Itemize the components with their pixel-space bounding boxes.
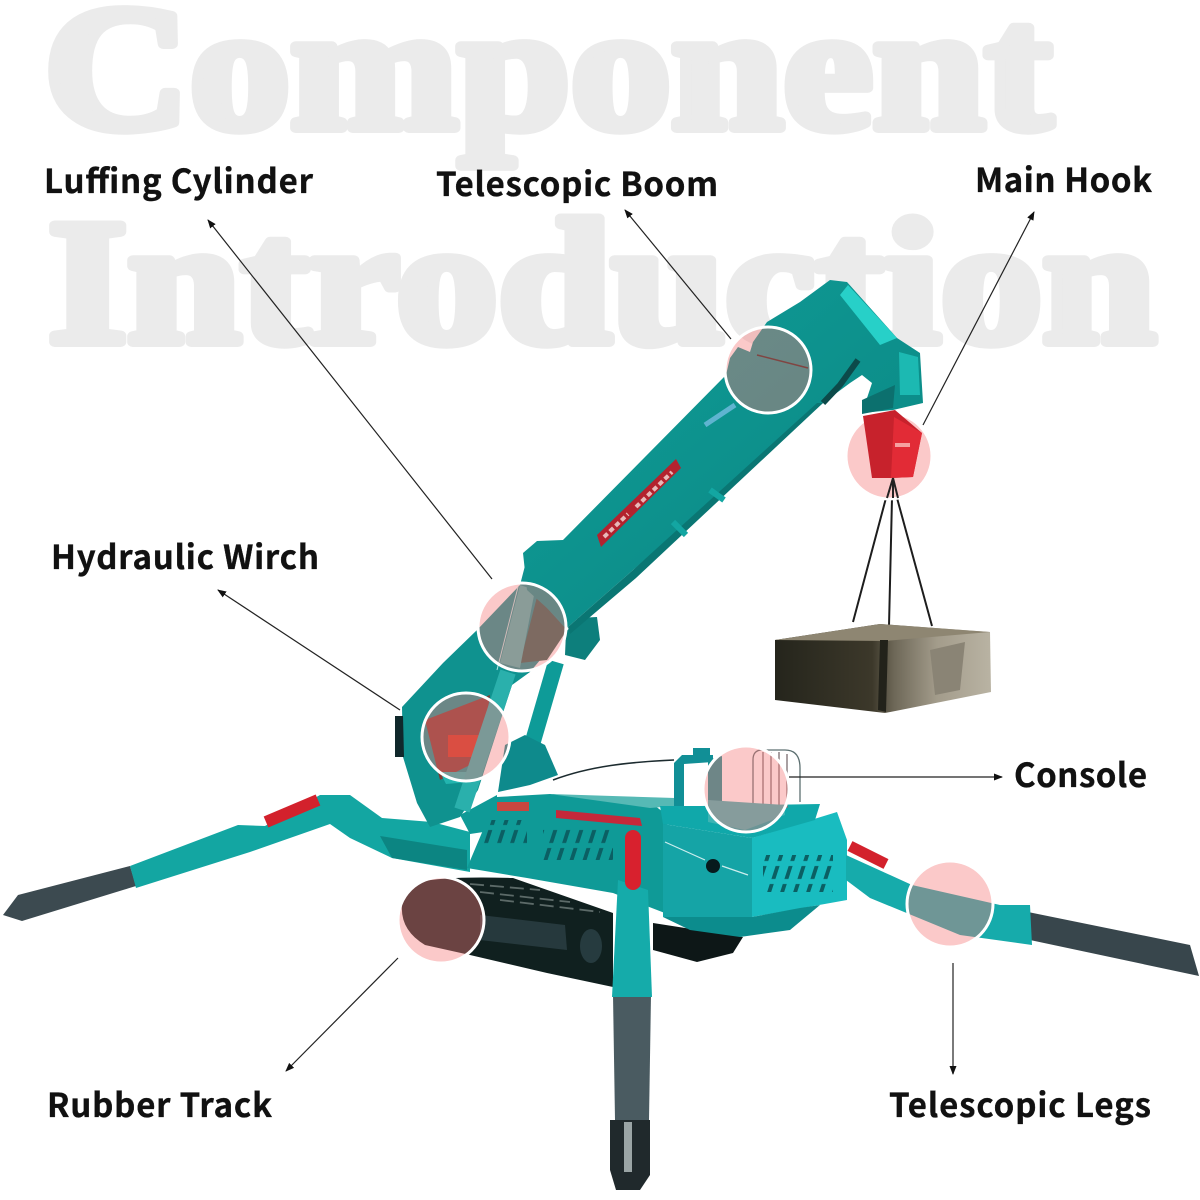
right telescopic leg bbox=[846, 846, 1199, 976]
label: Telescopic Legs: Telescopic Legs bbox=[889, 1079, 1151, 1127]
arrow: main hook bbox=[923, 212, 1034, 425]
background title: Introduction bbox=[48, 183, 1156, 381]
label: Telescopic Boom: Telescopic Boom bbox=[436, 158, 718, 206]
background title bbox=[44, 0, 1156, 381]
crane illustration bbox=[3, 280, 1199, 1190]
highlight circle: rubber track bbox=[398, 877, 484, 963]
left telescopic leg bbox=[3, 795, 470, 921]
arrow: telescopic legs bbox=[952, 963, 954, 1074]
front telescopic leg bbox=[610, 838, 652, 1190]
label: Console: Console bbox=[1014, 749, 1147, 797]
label: Main Hook: Main Hook bbox=[975, 154, 1152, 202]
arrow: telescopic boom bbox=[625, 210, 731, 339]
arrow: luffing cylinder bbox=[208, 220, 492, 579]
label: Luffing Cylinder: Luffing Cylinder bbox=[44, 155, 314, 203]
label: Rubber Track: Rubber Track bbox=[47, 1079, 272, 1127]
main hook bbox=[863, 410, 922, 498]
arrow: hydraulic winch bbox=[218, 590, 400, 710]
highlight circle: telescopic legs bbox=[907, 861, 993, 947]
highlight circle: hydraulic winch bbox=[422, 693, 510, 781]
machine body bbox=[460, 748, 847, 937]
highlight circle: main hook bbox=[846, 413, 932, 499]
arrow: console bbox=[789, 776, 1002, 778]
highlight circle: console bbox=[703, 746, 789, 832]
telescopic boom bbox=[523, 280, 923, 634]
boom base arm bbox=[395, 558, 600, 827]
arrow: rubber track bbox=[286, 958, 398, 1071]
label: Hydraulic Wirch: Hydraulic Wirch bbox=[51, 531, 319, 579]
console bbox=[708, 750, 800, 830]
load block with ropes bbox=[775, 498, 991, 713]
highlight circle: telescopic boom bbox=[725, 327, 811, 413]
rubber track bbox=[402, 878, 743, 987]
highlight circle: luffing cylinder bbox=[478, 583, 566, 671]
support strut bbox=[531, 662, 556, 748]
